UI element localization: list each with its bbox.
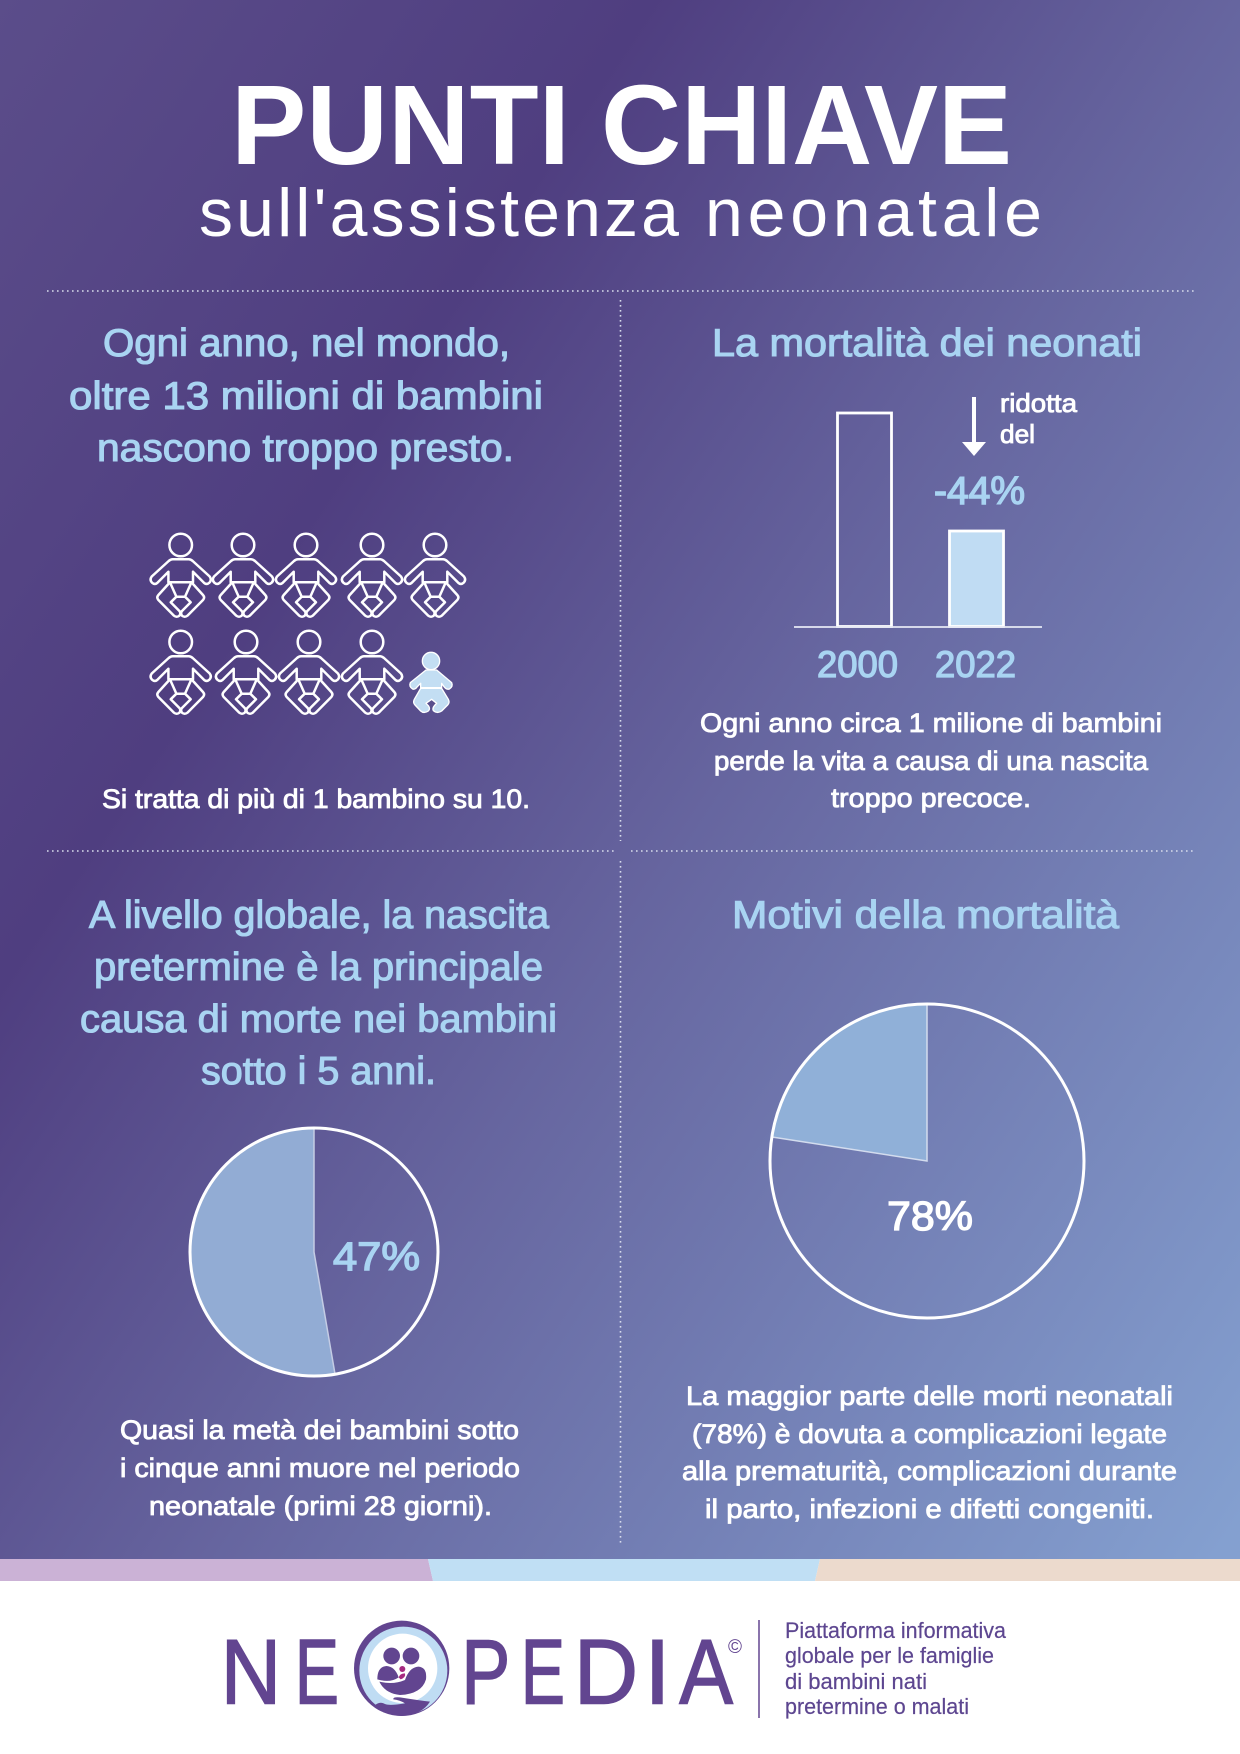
- heading: causes of mortality: Motivi della mortalità: [732, 894, 1119, 937]
- heading: under five deaths: A livello globale, la nascita: [89, 894, 549, 937]
- value: -44%: -44%: [934, 470, 1025, 513]
- panel: causes of mortality: [682, 894, 1177, 1524]
- tagline: [785, 1618, 1007, 1719]
- logo emblem: [354, 1621, 449, 1716]
- label: reduced by: ridotta: [1000, 388, 1078, 418]
- paragraph: causes: il parto, infezioni e difetti congeniti.: [705, 1494, 1154, 1524]
- subheading: sull'assistenza: [199, 175, 679, 251]
- paragraph: causes: [682, 1381, 1177, 1524]
- tagline: globale per le famiglie: [785, 1643, 994, 1668]
- paragraph: under five deaths: neonatale (primi 28 giorni).: [149, 1491, 492, 1521]
- footer: Neopedia logo: [221, 1618, 1007, 1724]
- paragraph: causes: La maggior parte delle morti neonatali: [686, 1381, 1173, 1411]
- bar chart: 2022: [935, 644, 1016, 685]
- paragraph: causes: alla prematurità, complicazioni durante: [682, 1456, 1177, 1486]
- heading: under five deaths: [80, 894, 557, 1093]
- panel: mortality trend: [700, 322, 1162, 813]
- subheading: neonatale: [705, 175, 1042, 251]
- heading: under five deaths: causa di morte nei bambini: [80, 998, 557, 1041]
- paragraph: one million: [700, 708, 1162, 813]
- heading: births: nascono troppo presto.: [97, 427, 514, 470]
- main heading: PUNTI: [231, 62, 570, 188]
- paragraph: one million: troppo precoce.: [831, 783, 1031, 813]
- label: reduced by: del: [1000, 419, 1035, 449]
- wordmark: I: [644, 1622, 671, 1724]
- paragraph: one million: perde la vita a causa di una nascita: [714, 746, 1149, 776]
- paragraph: under five deaths: [120, 1415, 520, 1521]
- pie chart: 47%: 47%: [333, 1235, 420, 1279]
- wordmark: N: [221, 1622, 281, 1724]
- pie chart: 47%: [189, 1128, 438, 1376]
- wordmark: A: [679, 1622, 734, 1724]
- icon: highlighted baby: [410, 652, 452, 712]
- title: [199, 62, 1042, 251]
- arrow: reduction: [962, 397, 986, 456]
- tagline: pretermine o malati: [785, 1694, 969, 1719]
- wordmark: E: [295, 1622, 339, 1724]
- footer colour strip: [0, 1559, 1240, 1581]
- label: reduced by: [1000, 388, 1078, 449]
- wordmark: P: [461, 1622, 510, 1724]
- heading: mortality trend: La mortalità dei neonati: [712, 322, 1142, 365]
- logo divider: [758, 1620, 760, 1718]
- main heading: CHIAVE: [601, 62, 1012, 188]
- icon: 10 babies: [151, 534, 465, 714]
- wordmark: D: [574, 1622, 638, 1724]
- panel: under five deaths: [80, 894, 557, 1521]
- heading: under five deaths: sotto i 5 anni.: [201, 1050, 436, 1093]
- caption: births: Si tratta di più di 1 bambino su 10.: [102, 784, 530, 814]
- paragraph: one million: Ogni anno circa 1 milione di bambini: [700, 708, 1162, 738]
- tagline: Piattaforma informativa: [785, 1618, 1007, 1643]
- heading: births: Ogni anno, nel mondo,: [103, 322, 510, 365]
- tagline: di bambini nati: [785, 1669, 927, 1694]
- copyright mark: ©: [728, 1637, 742, 1658]
- paragraph: causes: (78%) è dovuta a complicazioni legate: [692, 1419, 1167, 1449]
- bar chart: [794, 413, 1042, 685]
- wordmark: [221, 1622, 734, 1724]
- paragraph: under five deaths: i cinque anni muore nel periodo: [120, 1453, 520, 1483]
- paragraph: under five deaths: Quasi la metà dei bambini sotto: [120, 1415, 519, 1445]
- pie chart: 78%: [770, 1004, 1084, 1318]
- pie chart: 78%: 78%: [887, 1193, 973, 1239]
- heading: under five deaths: pretermine è la principale: [94, 946, 543, 989]
- heading: births: [69, 322, 543, 470]
- heading: births: oltre 13 milioni di bambini: [69, 375, 543, 418]
- wordmark: E: [521, 1622, 565, 1724]
- bar chart: 2000: [817, 644, 898, 685]
- panel: births: [69, 322, 543, 814]
